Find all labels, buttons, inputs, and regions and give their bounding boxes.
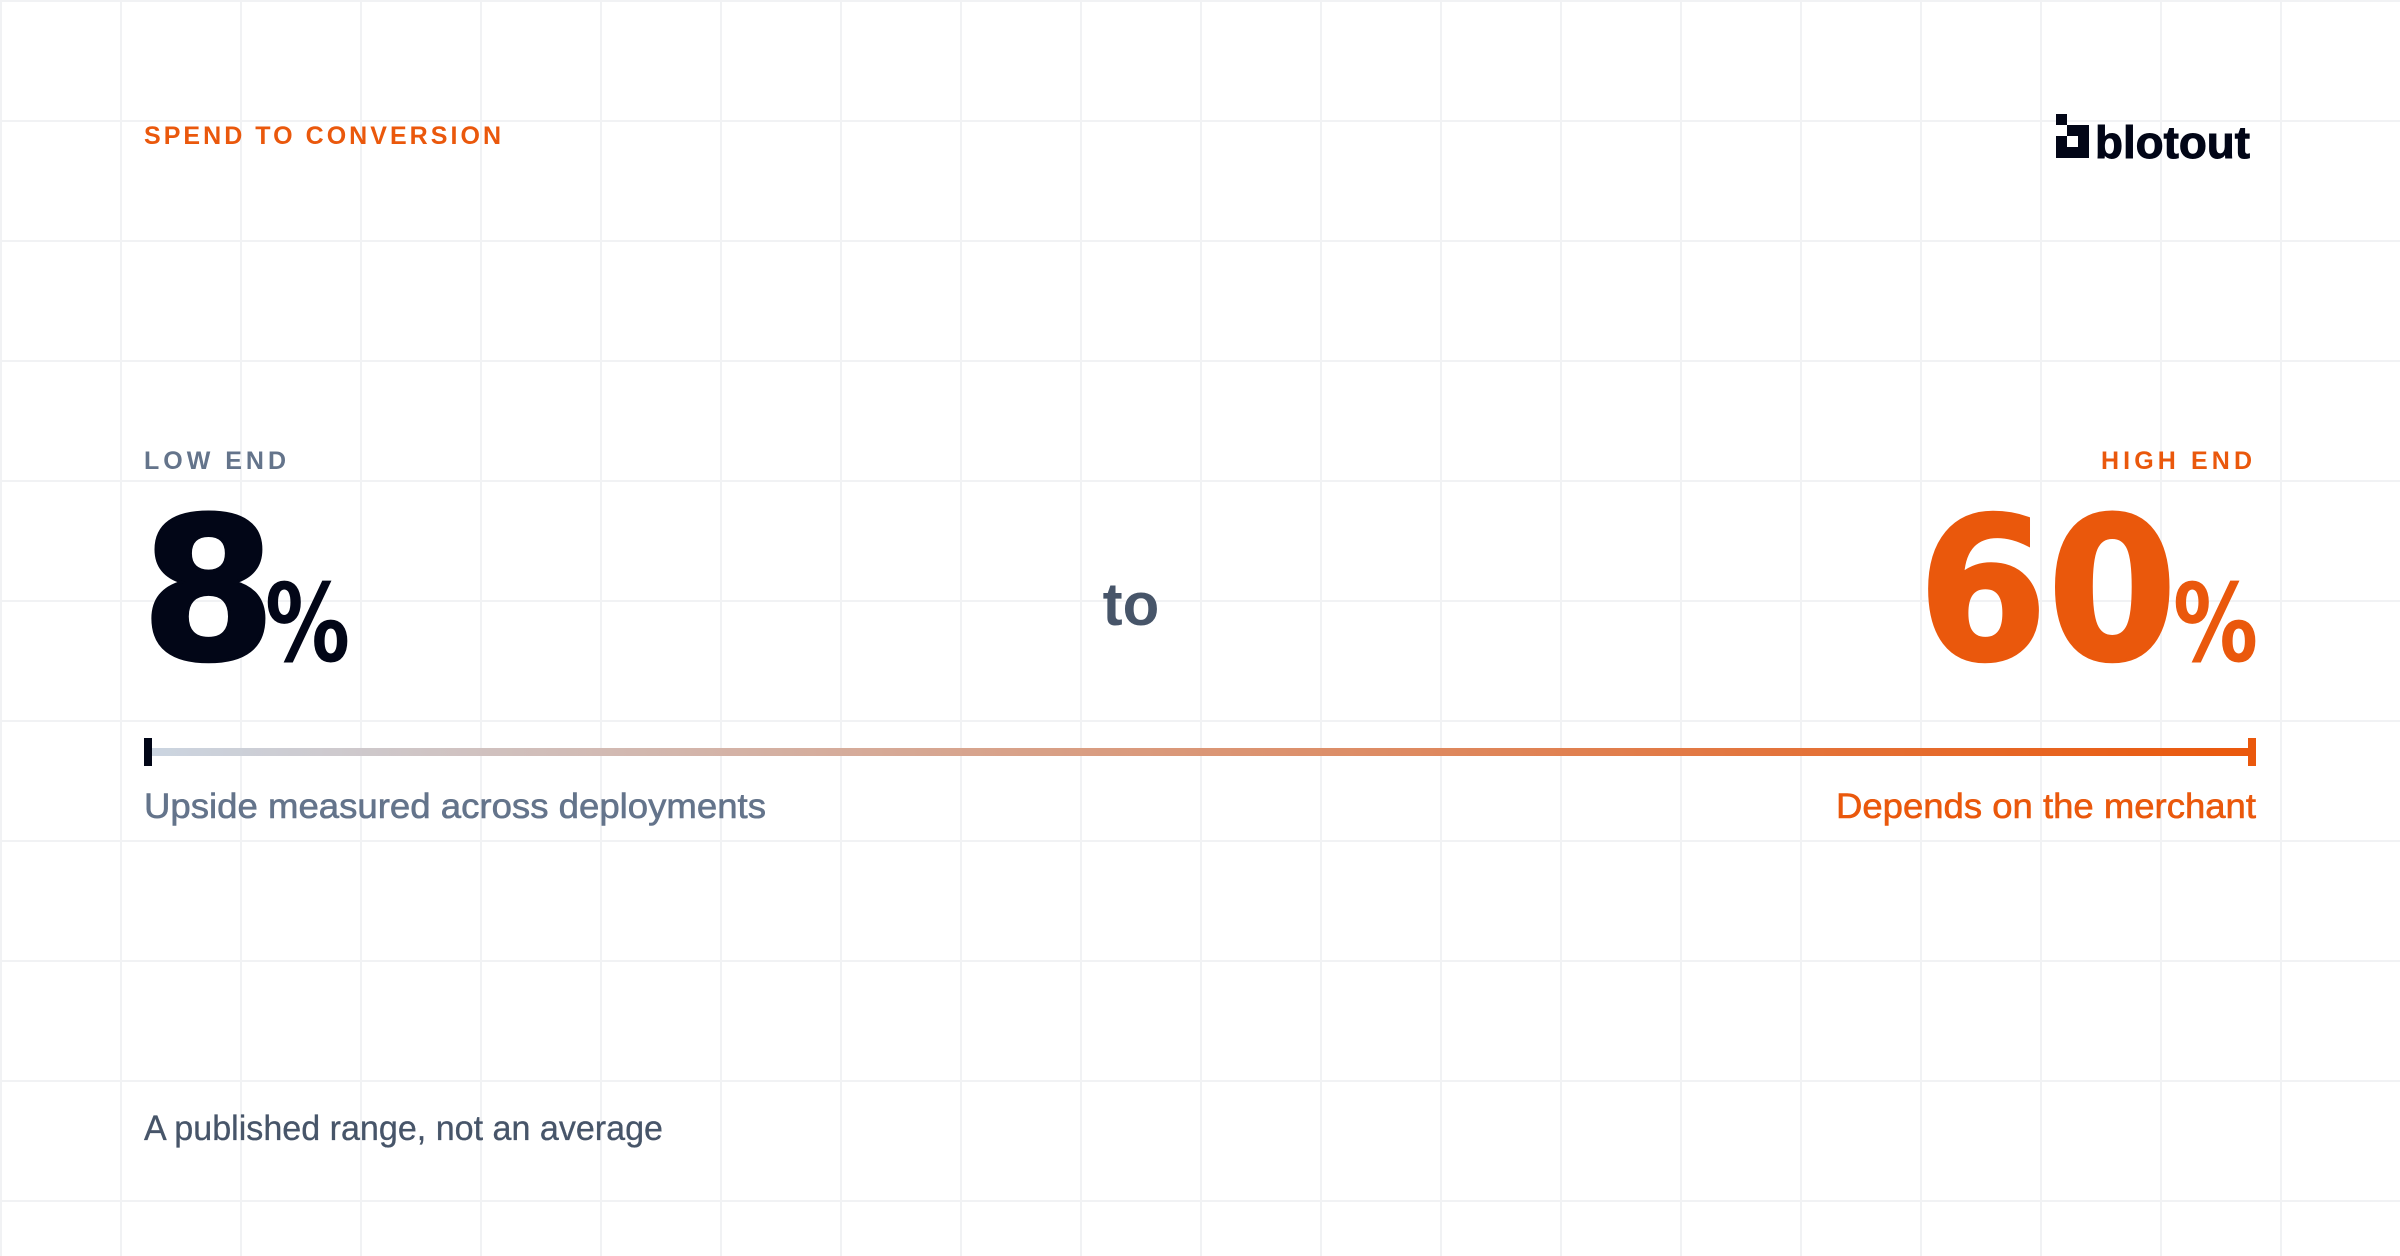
high tick — [2248, 738, 2256, 766]
high end value: 60% — [1918, 475, 2258, 706]
icon: logo mark — [2056, 114, 2089, 158]
big number 60: 60 — [1918, 475, 2177, 706]
logo: blotout — [2056, 114, 2250, 168]
low tick — [144, 738, 152, 766]
low end label: LOW END — [144, 447, 286, 475]
range bar — [144, 738, 2256, 766]
percent sign: % — [265, 562, 350, 687]
low end value: 8% — [141, 475, 350, 706]
eyebrow heading: SPEND TO CONVERSION — [144, 122, 501, 150]
percent sign: % — [2173, 562, 2258, 687]
big number 8: 8 — [141, 475, 276, 706]
low end caption: Upside measured across deployments — [144, 787, 766, 826]
connector word: to: to — [1103, 571, 1159, 638]
footer note: A published range, not an average — [144, 1109, 663, 1148]
high end label: HIGH END — [2101, 447, 2252, 475]
logo wordmark: blotout — [2095, 117, 2250, 168]
gradient track — [148, 748, 2252, 756]
high end caption: Depends on the merchant — [1836, 787, 2256, 826]
